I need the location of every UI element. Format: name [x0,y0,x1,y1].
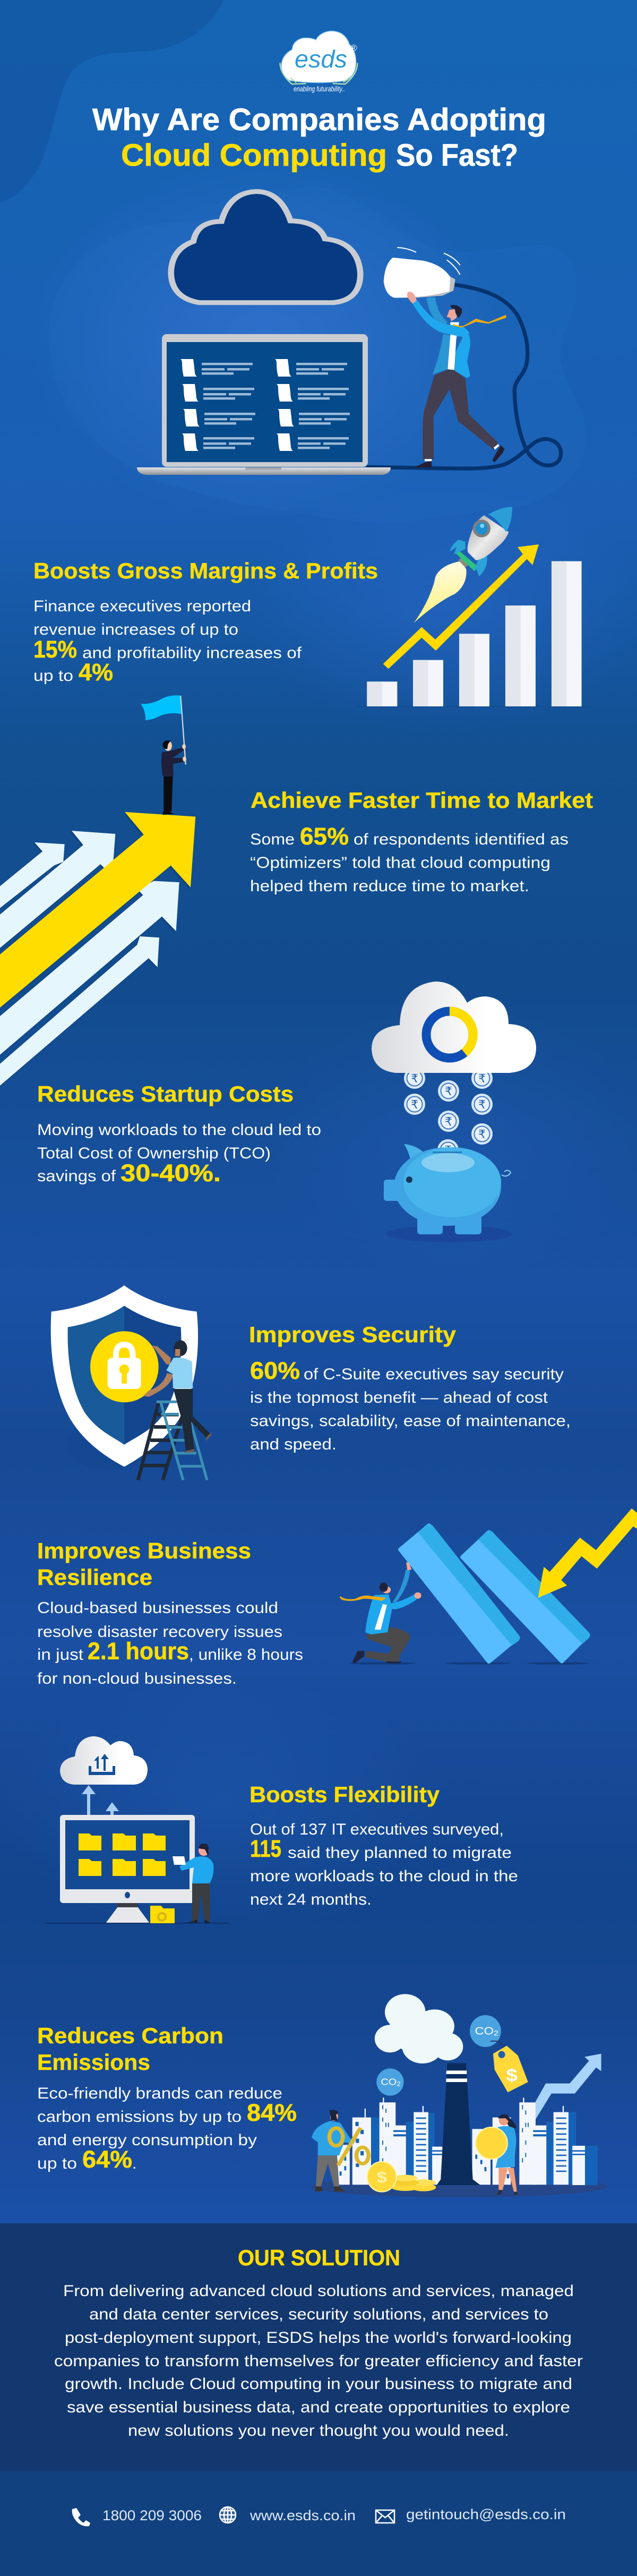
text block: revenue increases of up to [33,621,238,638]
heading: Improves Business [37,1538,251,1563]
monitor [60,1815,195,1923]
badge: CO2 small: 2 [397,2080,401,2087]
text block [37,1599,303,1687]
text block: up to [33,667,73,685]
panel: improves business resilience [37,1508,637,1687]
title [92,103,546,173]
icon: phone [72,2508,90,2526]
panel: reduces startup costs [37,982,536,1242]
panel: achieve faster time to market [0,695,593,1086]
text block: growth. Include Cloud computing in your business to migrate and [65,2375,572,2393]
text block: up to [37,2155,77,2172]
woman with coin [476,2114,518,2195]
icon: rocket [414,507,512,623]
heading: Reduces Carbon [37,2023,223,2048]
badge: CO2 large: CO [475,2025,494,2037]
laptop [137,334,391,475]
hero illustration: cloud, laptop and man with plug [137,192,561,475]
illustration: city with chimney [311,1994,607,2197]
text block: savings, scalability, ease of maintenance, [250,1412,571,1430]
illustration: coins: ₹ [411,1072,418,1085]
logo: esds [280,31,357,93]
coins: $ [377,2168,387,2186]
text block: 2.1 hours [88,1637,189,1665]
illustration: arrows with flag man [0,695,195,1086]
illustration: coins: ₹ [478,1128,486,1141]
icon: dark cloud [171,192,360,303]
illustration: monitor, folders and cloud [45,1736,229,1924]
icon: mail [376,2510,394,2523]
text block: and energy consumption by [37,2131,257,2149]
icon: folder with gear [150,1906,175,1923]
block 1 [400,1524,520,1662]
cable [366,285,561,468]
heading: Emissions [37,2050,150,2075]
panel: boosts flexibility [45,1736,518,1924]
footer: contact details [0,2471,637,2576]
buildings [337,2097,598,2185]
arrows [0,812,195,1086]
logo: esds: enabling futurability.. [294,84,345,93]
text block [250,1821,518,1908]
icon: cloud with donut [372,982,536,1073]
panel: improves security [51,1285,571,1480]
text block [54,2282,583,2439]
man on ladder [143,1340,212,1453]
text block: Some [250,831,295,848]
text block: in just [37,1646,84,1664]
icon: upload cloud [60,1736,148,1785]
phone number: 1800 209 3006 [102,2507,202,2523]
ladder [138,1402,207,1480]
arrows up [82,1785,119,1832]
text block: next 24 months. [250,1891,372,1908]
icon: price tag: $ [506,2066,518,2085]
heading: OUR SOLUTION [238,2245,400,2270]
heading: Achieve Faster Time to Market [251,788,593,813]
icon: shield with lock and man on ladder [51,1285,212,1480]
text block: Eco-friendly brands can reduce [37,2085,282,2102]
text block [37,2085,297,2173]
icon: flag [141,695,186,765]
text block: is the topmost benefit — ahead of cost [250,1389,548,1406]
text block [37,1121,321,1187]
text block: Out of 137 IT executives surveyed, [250,1821,504,1838]
text block: save essential business data, and create opportunities to explore [67,2399,570,2416]
icon: globe [220,2507,236,2523]
kneeling man [340,1563,421,1664]
badge: CO2 large: 2 [494,2029,498,2037]
text block: 30-40%. [120,1159,221,1187]
illustration: coins: ₹ [478,1072,486,1085]
email: getintouch@esds.co.in [406,2506,566,2522]
text block [33,598,302,686]
folders [79,1833,166,1876]
panel: boosts gross margins and profits [33,507,591,707]
arrow: rising trend [536,2054,601,2119]
arrow: falling trend [538,1508,637,1598]
coins [367,2162,436,2192]
text block: more workloads to the cloud in the [250,1867,518,1885]
text block [250,1357,571,1453]
illustration: man holding falling blocks [340,1508,637,1665]
heading [37,2023,223,2075]
text block: said they planned to migrate [288,1844,512,1862]
text block: 65% [300,823,349,850]
text block: helped them reduce time to market. [250,877,529,895]
text block: and data center services, security solutions, and services to [89,2306,548,2323]
text block [250,823,569,895]
heading: Boosts Flexibility [249,1782,440,1807]
badge: CO2 small [376,2068,404,2096]
text block: of C-Suite executives say security [304,1366,564,1383]
text block: post-deployment support, ESDS helps the world's forward-looking [65,2329,572,2347]
heading: Improves Security [249,1322,457,1347]
text block: new solutions you never thought you would need. [128,2422,509,2439]
text block: 84% [247,2099,297,2126]
heading: Resilience [37,1565,152,1590]
panel: our solution [0,2223,637,2471]
panel: reduces carbon emissions [37,1994,607,2197]
man with percent sign [312,2110,368,2192]
chart: rising bars with rocket [356,507,591,707]
logo: esds: ® [350,43,357,53]
illustration: coins: ₹ [478,1098,486,1111]
block 2 [462,1530,590,1661]
icon: price tag [490,2041,528,2092]
text block: Cloud-based businesses could [37,1599,278,1617]
text block: 64% [82,2146,132,2173]
heading: Boosts Gross Margins & Profits [33,558,378,583]
bars [356,561,591,707]
heading [37,1538,251,1590]
text block: 4% [79,659,113,686]
text block: companies to transform themselves for greater efficiency and faster [54,2352,583,2370]
text block: and speed. [250,1436,337,1453]
text block: carbon emissions by up to [37,2108,242,2126]
title: Why Are Companies Adopting [92,103,546,137]
logo: esds: esds [295,45,347,73]
badge: CO2 small: CO [381,2077,397,2087]
text block: and profitability increases of [82,644,302,662]
text block: for non-cloud businesses. [37,1670,237,1687]
illustration: coins: ₹ [445,1115,452,1128]
man holding plug [384,248,506,467]
illustration: coins: ₹ [445,1085,452,1098]
man with laptop [173,1844,213,1923]
text block: Total Cost of Ownership (TCO) [37,1145,271,1162]
text block: , unlike 8 hours [189,1646,303,1664]
text block: 15% [33,636,77,663]
website: www.esds.co.in [249,2507,356,2523]
title: Cloud Computing [121,138,387,173]
illustration: coins: ₹ [444,1144,452,1157]
illustration: coins: ₹ [411,1098,418,1111]
badge: CO2 large [470,2015,501,2047]
text block: 60% [250,1357,300,1384]
heading: Reduces Startup Costs [37,1081,294,1106]
illustration: coins [404,1068,493,1161]
icon: piggy bank [384,1144,512,1242]
text block: From delivering advanced cloud solutions and services, managed [63,2282,574,2300]
text block: Moving workloads to the cloud led to [37,1121,321,1139]
text block: Finance executives reported [33,598,251,615]
arrow: growth trend [383,544,539,669]
man with flag [161,740,186,815]
text block: “Optimizers” told that cloud computing [250,854,550,872]
text block: 115 [250,1835,281,1862]
chimney with smoke [375,1994,480,2185]
text block: of respondents identified as [354,831,569,848]
text block: . [132,2155,136,2172]
text block: savings of [37,1167,116,1185]
title: So Fast? [396,138,518,173]
text block: resolve disaster recovery issues [37,1623,282,1641]
